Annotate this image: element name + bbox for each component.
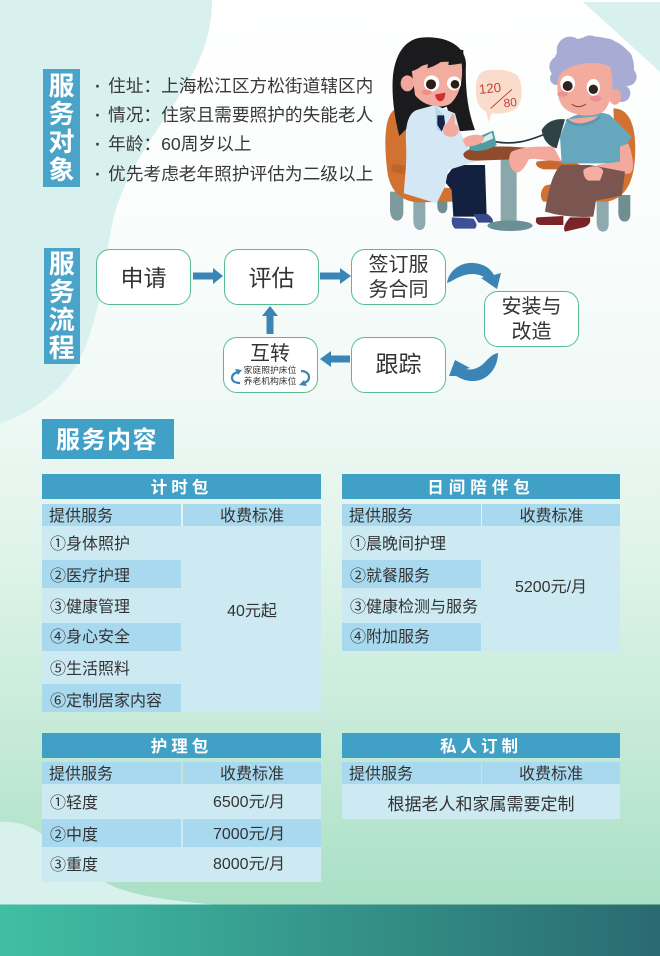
column head: price: 收费标准 (519, 766, 583, 783)
column head: price: 收费标准 (220, 766, 284, 783)
row 1 price: 6500元/月 (213, 794, 285, 811)
column head: price: 收费标准 (220, 508, 284, 525)
flow step: 安装与改造: 改造 (512, 321, 552, 343)
column head: services: 提供服务 (49, 766, 113, 783)
arrow: 安装 to 跟踪 curved (449, 353, 498, 381)
top-right pale corner (583, 2, 660, 72)
panel heading (42, 733, 321, 758)
speech bubble with reading 120/80 (476, 70, 522, 122)
row 3: ③健康管理 (50, 599, 130, 616)
list item: age: 年龄：60周岁以上 (108, 134, 252, 154)
stripe row 4 (342, 623, 480, 651)
doctor's thumb-up hand (443, 113, 459, 137)
flow step: 安装与改造: 安装与 (502, 296, 562, 318)
section label: 服务对象: 对 (48, 127, 74, 157)
elderly woman's hair (549, 35, 637, 102)
flow step: 签订服务合同: 务合同 (368, 279, 428, 301)
elderly woman's face (557, 63, 621, 116)
row 3: ③健康检测与服务 (350, 599, 478, 616)
arrow: 互转 to 评估 (262, 306, 278, 334)
blood pressure monitor and doctor's hand (463, 131, 497, 151)
elderly woman's arm (509, 147, 562, 173)
panel heading: 计时包 (151, 479, 212, 497)
column head: price: 收费标准 (519, 508, 584, 525)
panel heading: 护理包 (151, 738, 212, 756)
panel: 日间陪伴包 (342, 474, 620, 651)
panel heading (42, 474, 321, 499)
doctor's legs and shoes (443, 165, 493, 229)
list item: situation: 情况：住家且需要照护的失能老人 (108, 105, 373, 125)
doctor's face (401, 47, 463, 106)
column head: services: 提供服务 (349, 508, 413, 525)
list item: address: 住址：上海松江区方松街道辖区内 (108, 76, 373, 96)
panel heading: 私人订制 (440, 738, 522, 756)
row 1: ①身体照护 (50, 536, 130, 553)
stripe left (42, 819, 180, 847)
step title: 互转: 互转 (250, 342, 290, 364)
table body with note (342, 784, 620, 819)
panel: 计时包 (42, 474, 321, 712)
list item: address: · (95, 76, 101, 96)
section label: 服务对象: 象 (48, 155, 74, 185)
stripe row 6 (42, 684, 180, 712)
row 4: ④身心安全 (50, 629, 130, 646)
doctor's coat (404, 105, 475, 203)
table body (42, 526, 321, 712)
price: 5200元/月 (515, 579, 587, 596)
small arrow: right exchange (299, 371, 309, 386)
flow step: 申请 (96, 249, 191, 305)
section label: 服务流程: 程 (49, 333, 75, 363)
flow step: 互转 (223, 336, 318, 392)
panel heading: 日间陪伴包 (427, 479, 535, 497)
stripe row 4 (42, 623, 180, 651)
row 2 label: ②中度 (50, 827, 98, 844)
doctor's chair (385, 110, 453, 230)
list item: situation: · (95, 105, 101, 125)
column head: services (342, 762, 480, 784)
illustration: doctor measuring blood pressure of elderly woman (385, 35, 637, 232)
column head: price (482, 762, 620, 784)
footer band (0, 904, 660, 956)
arrow: 跟踪 to 互转 (320, 351, 350, 367)
list item: priority: · (95, 164, 101, 184)
bottom-left pale blob (0, 822, 219, 905)
top-left pale blob (0, 0, 212, 424)
column head: services (342, 504, 480, 526)
flow step: 签订服务合同: 签订服 (368, 254, 428, 276)
section label: 服务流程 (44, 248, 80, 364)
table body with note: 根据老人和家属需要定制 (388, 795, 574, 814)
elderly woman's hand on knee (583, 166, 603, 181)
column head: services (42, 504, 180, 526)
column head: services (42, 762, 180, 784)
table body (42, 784, 321, 882)
row 5: ⑤生活照料 (50, 661, 130, 678)
panel: 护理包 (42, 733, 321, 882)
flow step: 签订服务合同 (351, 249, 446, 305)
panel heading (342, 474, 620, 499)
row 6: ⑥定制居家内容 (50, 693, 162, 710)
section label: 服务流程: 流 (49, 305, 75, 335)
right chair (536, 108, 635, 232)
stripe right (183, 819, 321, 847)
column head: services: 提供服务 (349, 766, 413, 783)
list item: age: · (95, 134, 101, 154)
flow step: 跟踪: 跟踪 (376, 350, 422, 376)
panel heading (342, 733, 620, 758)
arrow: 评估 to 签订 (320, 268, 351, 284)
list: service target criteria (95, 76, 373, 184)
column head: price (183, 762, 321, 784)
row 4: ④附加服务 (350, 629, 430, 646)
flow step: 评估 (224, 249, 319, 305)
row 3 price: 8000元/月 (213, 856, 285, 873)
elderly woman's body (560, 112, 633, 177)
row 2 price: 7000元/月 (213, 826, 285, 843)
arrow: 申请 to 评估 (193, 268, 223, 284)
speech bubble with reading 120/80: 120 (478, 80, 502, 97)
flow step: 评估: 评估 (248, 265, 294, 291)
section label: 服务对象 (43, 69, 80, 187)
row 3 label: ③重度 (50, 857, 98, 874)
stripe row 2 (342, 560, 480, 588)
elderly woman's legs and shoes (536, 165, 625, 232)
row 2: ②就餐服务 (350, 568, 430, 585)
speech bubble with reading 120/80: 80 (503, 95, 518, 110)
section label: 服务对象: 务 (48, 99, 74, 129)
section label: 服务流程: 务 (49, 277, 75, 307)
row 1 label: ①轻度 (50, 795, 98, 812)
side table (463, 146, 553, 231)
price: 40元起 (227, 603, 277, 620)
doctor's hair back (393, 37, 475, 136)
column head: price (482, 504, 620, 526)
step detail: 家庭照护床位: 家庭照护床位 (244, 364, 296, 374)
section label: 服务流程: 服 (49, 249, 75, 279)
table body (342, 526, 620, 651)
list item: priority: 优先考虑老年照护评估为二级以上 (108, 164, 373, 184)
section label: 服务对象: 服 (48, 71, 74, 101)
flow step: 跟踪 (351, 336, 446, 392)
small arrow: left exchange (232, 369, 242, 383)
flow step: 申请: 申请 (120, 265, 166, 291)
section heading: 服务内容 (42, 419, 174, 459)
section heading: 服务内容: 服务内容 (56, 427, 158, 454)
flow step: 安装与改造 (484, 291, 579, 347)
panel: 私人订制 (342, 733, 620, 819)
blood pressure cuff and tube (495, 119, 565, 148)
row 2: ②医疗护理 (50, 568, 130, 585)
stripe row 2 (42, 560, 180, 588)
row 1: ①晨晚间护理 (350, 536, 446, 553)
arrow: 签订 to 安装 curved (447, 263, 501, 289)
column head: services: 提供服务 (49, 508, 113, 525)
column head: price (183, 504, 321, 526)
step detail: 养老机构床位: 养老机构床位 (244, 376, 296, 386)
